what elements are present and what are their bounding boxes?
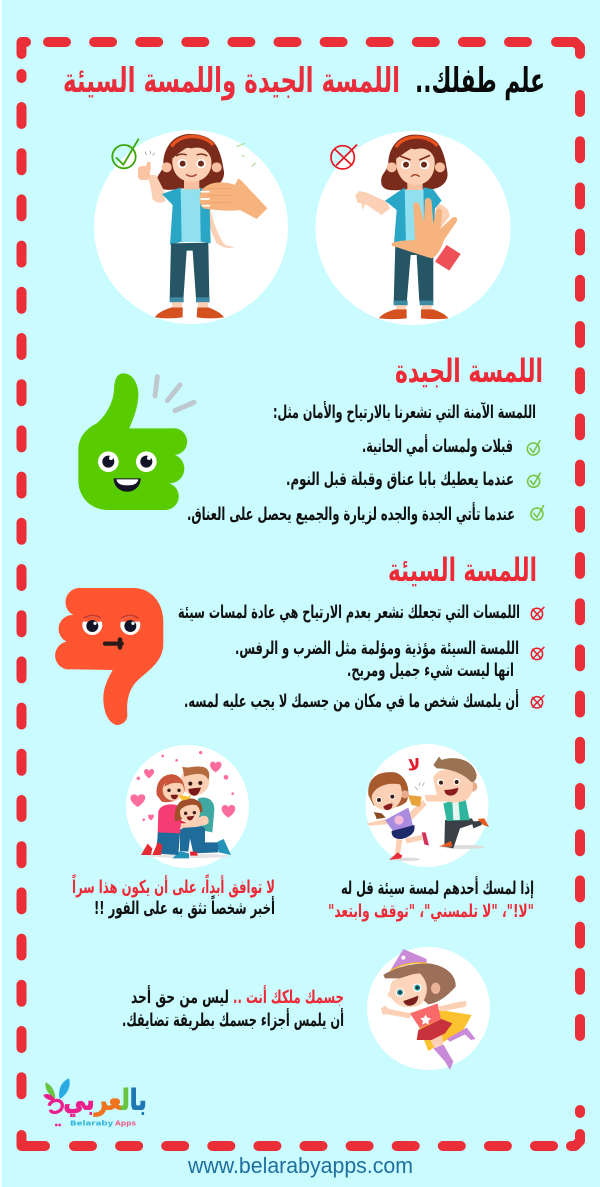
good touch text list <box>187 401 536 525</box>
icon: green thumbs up character <box>78 373 194 510</box>
caption: your body is yours: ليس من حق أحد <box>131 985 229 1008</box>
logo: Belaraby Apps: Apps <box>115 1119 137 1128</box>
logo: Belaraby Apps <box>43 1078 147 1128</box>
title: اللمسة الجيدة واللمسة السيئة <box>63 61 400 101</box>
illustration: family hug <box>126 745 249 868</box>
child <box>175 794 209 856</box>
boy <box>424 757 489 848</box>
bad touch text list <box>178 602 520 712</box>
website url: www.belarabyapps.com <box>187 1153 413 1178</box>
mom <box>141 774 185 855</box>
red no letter: لا <box>408 755 420 774</box>
girl <box>367 772 429 860</box>
icon: red cross in circle <box>331 145 357 169</box>
big adult hand touching shoulder <box>200 178 267 219</box>
icons: green checks <box>527 441 544 520</box>
illustration: super girl <box>367 947 490 1070</box>
illustration: boy touches girl who says no <box>366 744 489 867</box>
big adult hand with red sleeve <box>435 245 461 271</box>
logo: Belaraby Apps: بالعربي <box>63 1083 147 1116</box>
girl with thumb up <box>138 134 256 318</box>
caption: family help <box>72 874 275 919</box>
caption: your body is yours: جسمك ملكك أنت .. <box>233 985 344 1008</box>
icon: red thumbs down character <box>55 588 163 725</box>
good touch text list: قبلات ولمسات أمي الحانية. <box>362 434 513 457</box>
girl with thumb down and angry face <box>355 135 449 319</box>
caption: your body is yours: أن يلمس أجزاء جسمك بطريقة تضايقك. <box>122 1008 344 1031</box>
icon: green check in circle <box>112 139 138 168</box>
caption: say no <box>328 876 534 922</box>
caption: family help: لا توافق أبداً، على أن يكون هذا سراً <box>72 874 275 898</box>
panel: good touch girl illustration <box>94 130 288 324</box>
dad <box>172 766 231 858</box>
caption: family help: أخبر شخصاً تثق به على الفور !! <box>94 895 275 919</box>
panel: bad touch girl illustration <box>316 131 510 325</box>
logo: Belaraby Apps: Belaraby <box>70 1119 114 1128</box>
icons: red crosses <box>531 607 544 708</box>
caption: your body is yours <box>122 985 344 1031</box>
